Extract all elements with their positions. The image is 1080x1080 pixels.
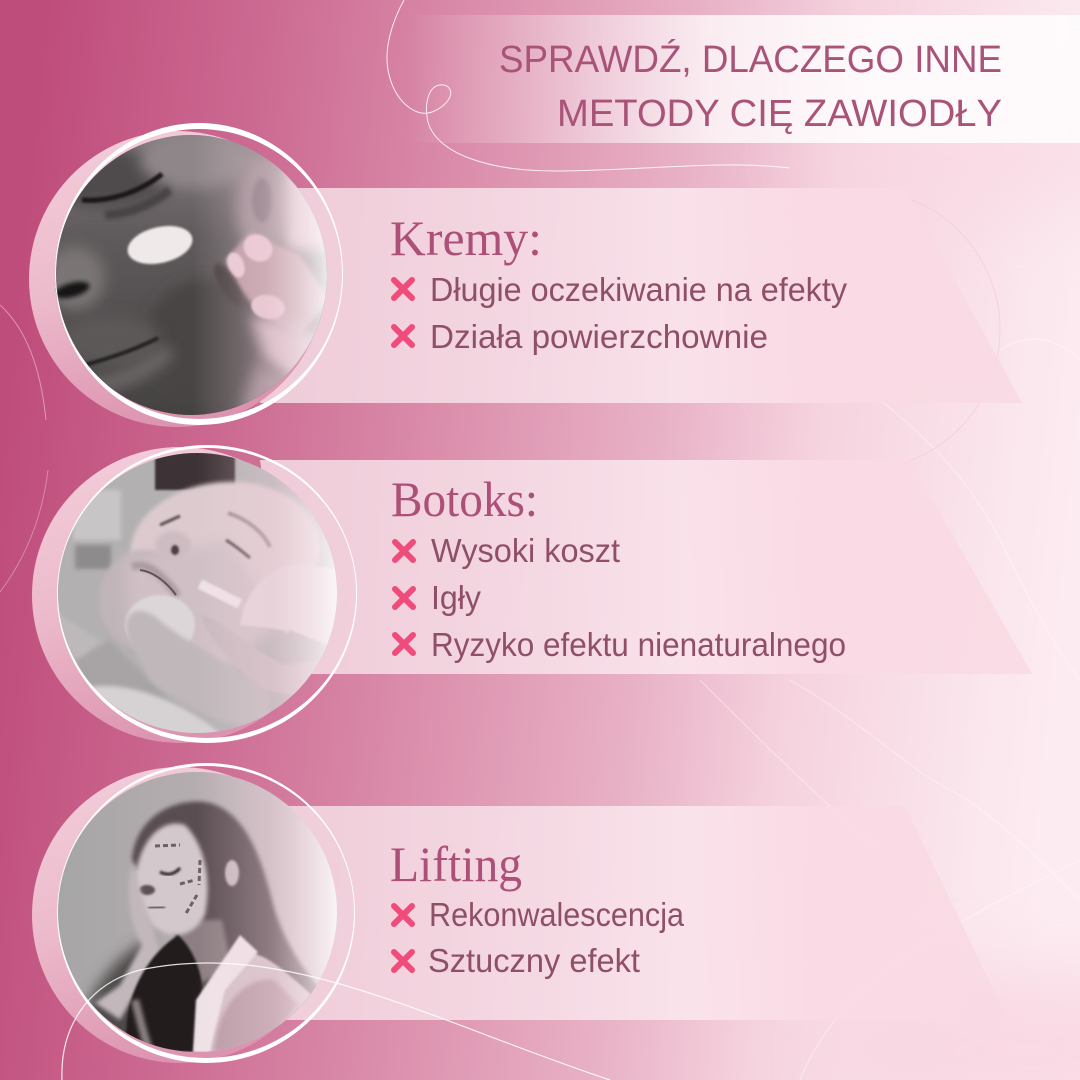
icon: cross [394, 327, 412, 345]
white ring: kremy [55, 123, 343, 425]
icon: cross [395, 589, 413, 607]
title band [405, 15, 1080, 143]
heading: lifting: Lifting [390, 836, 522, 892]
photo: woman with marked face [50, 770, 345, 1060]
item: Wysoki koszt [431, 532, 620, 569]
photo: injection [50, 450, 345, 745]
icon: cross [395, 542, 413, 560]
item: Działa powierzchownie [430, 318, 768, 355]
icon: cross [394, 280, 412, 298]
icon: cross [395, 635, 413, 653]
panel: botoks [32, 445, 1032, 745]
title: SPRAWDŹ, DLACZEGO INNE [499, 38, 1002, 81]
item: Rekonwalescencja [429, 896, 685, 933]
photo: cream on face [55, 135, 327, 415]
item: Igły [431, 579, 481, 616]
item: Długie oczekiwanie na efekty [430, 271, 847, 308]
panel: kremy [29, 123, 1022, 427]
icon: cross [394, 952, 412, 970]
item: Sztuczny efekt [428, 942, 640, 979]
band: botoks [260, 460, 1032, 674]
band: kremy [260, 188, 1022, 403]
crescent disc: lifting [32, 767, 328, 1063]
title: METODY CIĘ ZAWIODŁY [557, 93, 1002, 135]
decorative thin curves [0, 0, 790, 592]
icon: cross [394, 906, 412, 924]
panel: lifting [32, 763, 1008, 1063]
crescent disc: kremy [29, 131, 325, 427]
band: lifting [285, 806, 1008, 1020]
white ring: botoks [57, 445, 357, 743]
item: Ryzyko efektu nienaturalnego [431, 626, 846, 663]
heading: botoks: Botoks: [391, 471, 538, 527]
white ring: lifting [57, 763, 355, 1063]
crescent disc: botoks [32, 447, 328, 743]
heading: kremy: Kremy: [390, 210, 542, 266]
title [499, 38, 1002, 135]
bottom curve [62, 963, 610, 1080]
